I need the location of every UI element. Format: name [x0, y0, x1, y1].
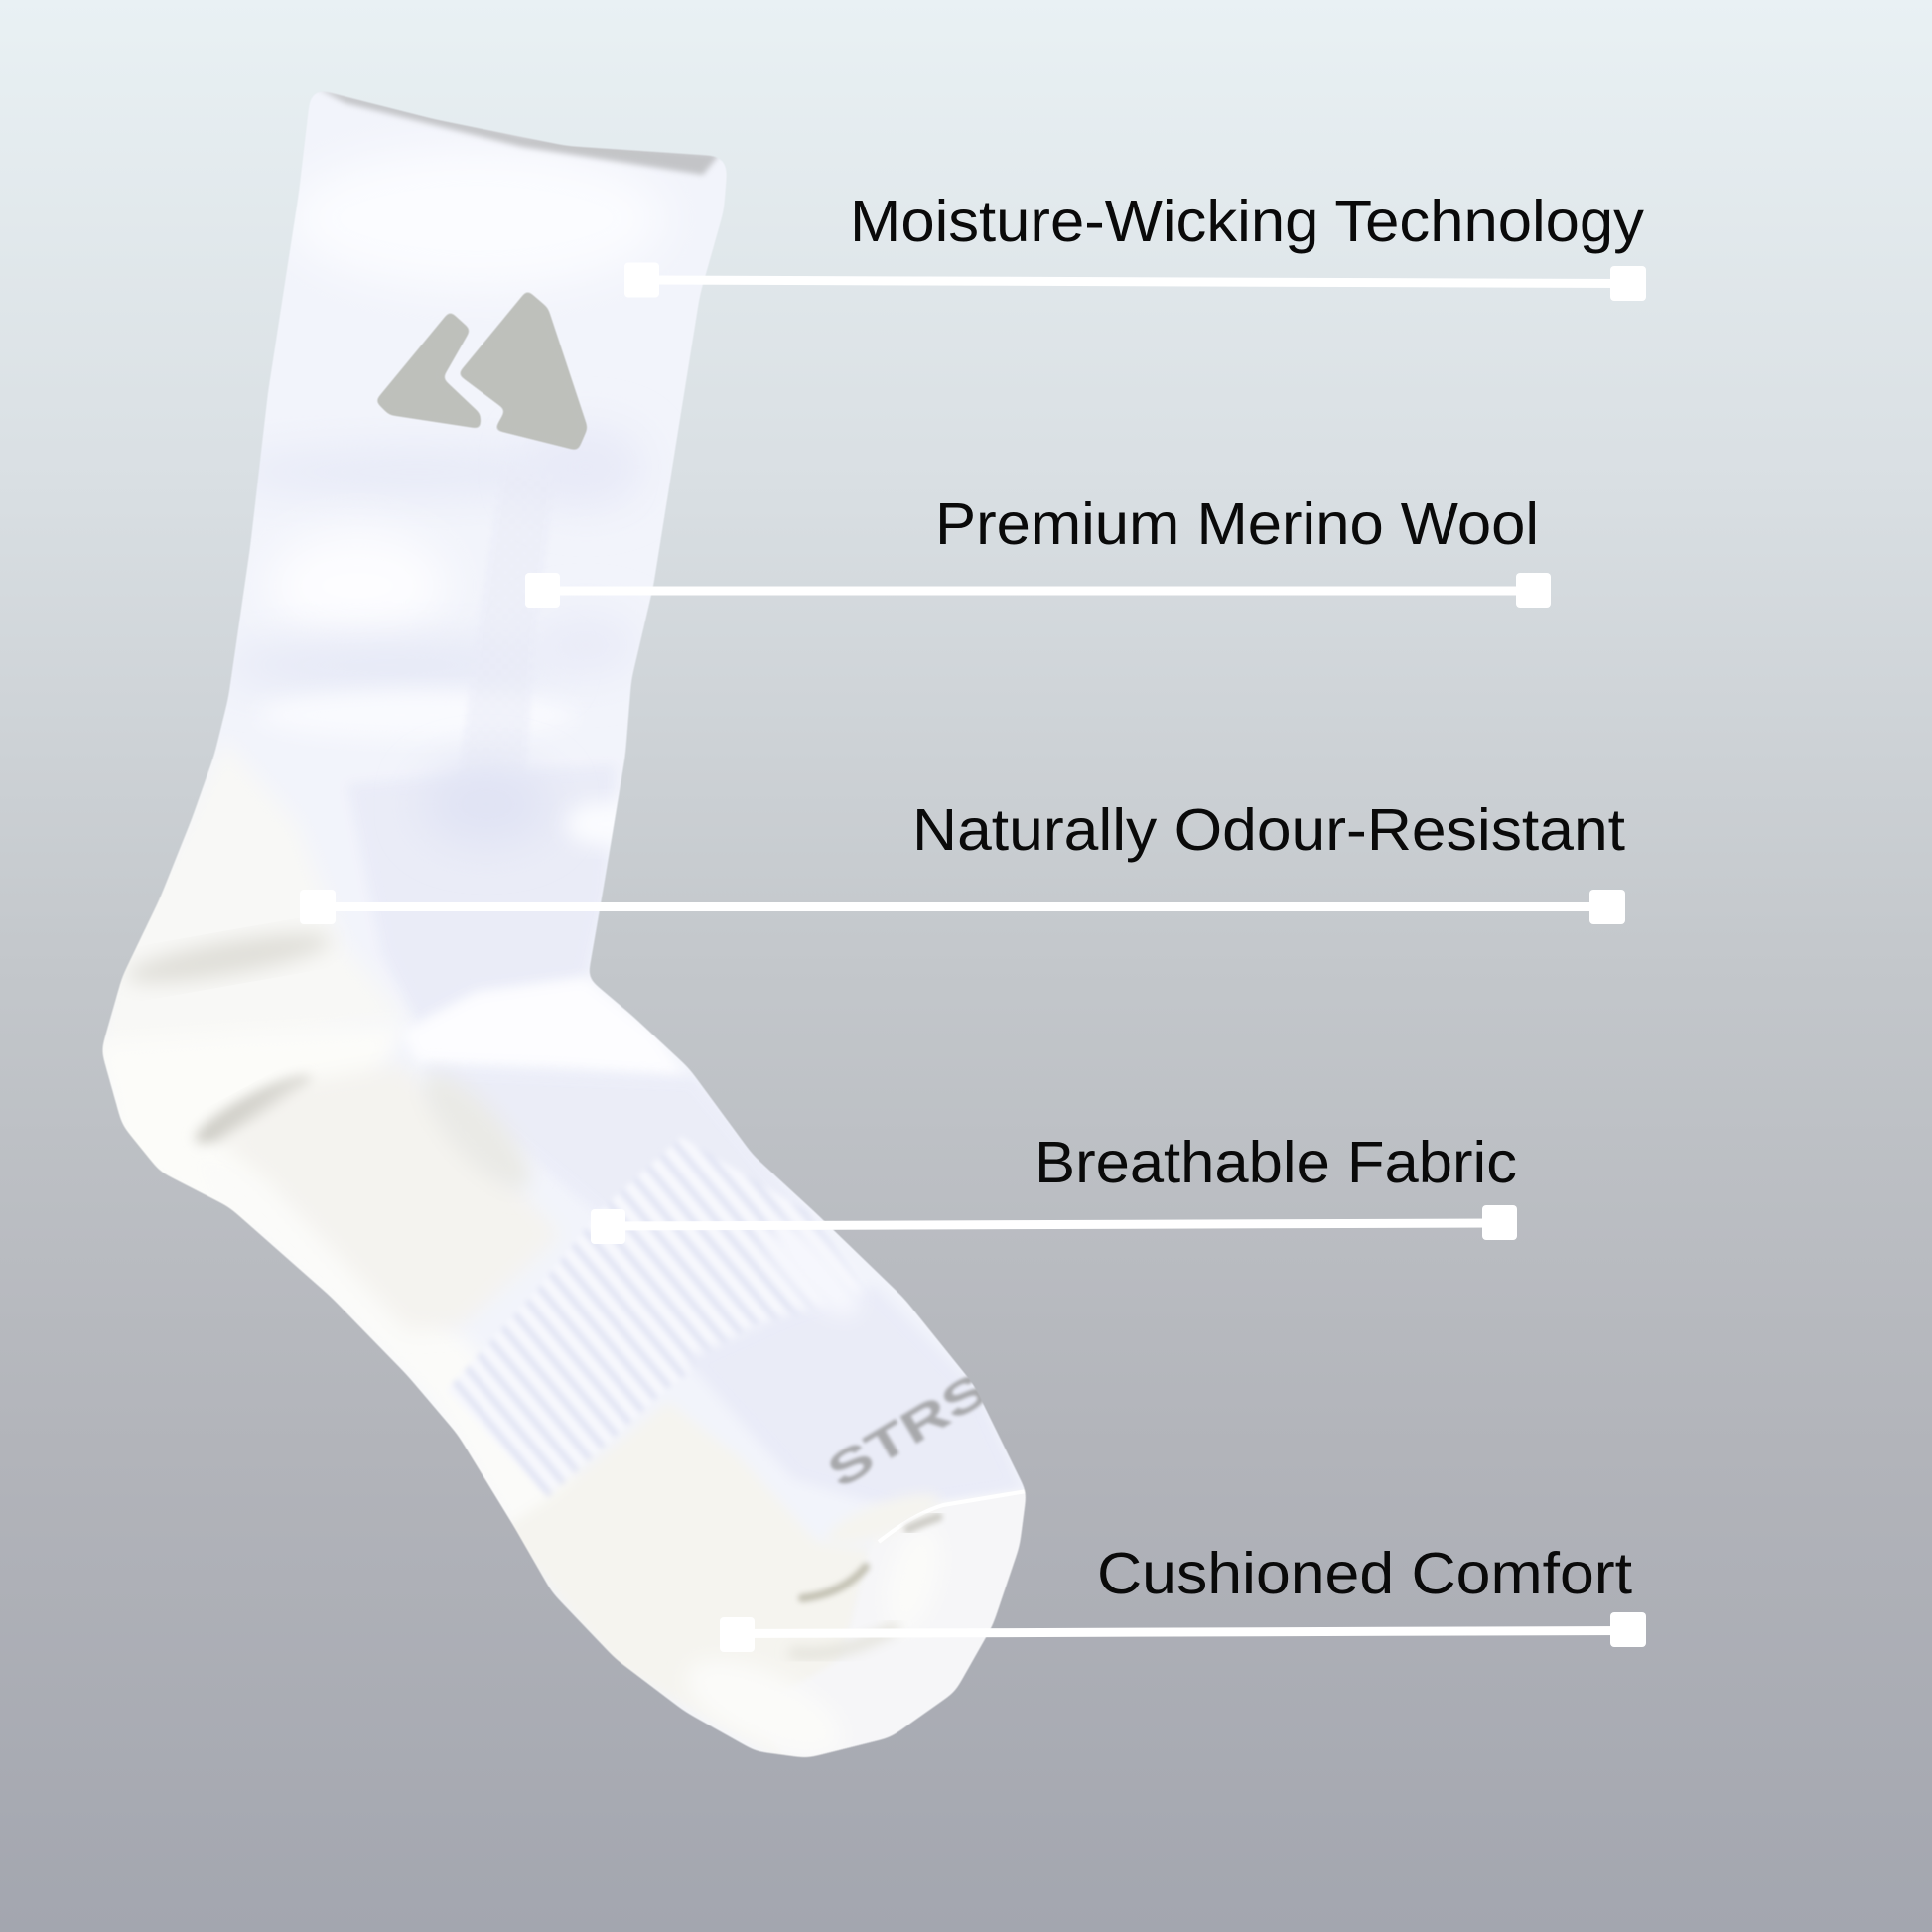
forefoot knit	[701, 1296, 1006, 1495]
callout: Premium Merino Wool	[525, 491, 1551, 608]
label text: Cushioned Comfort	[1097, 1541, 1632, 1606]
sock anchor	[591, 1209, 625, 1244]
instep white band	[412, 980, 672, 1069]
sock photo illustration	[79, 69, 1052, 1777]
mountain logo on cuff	[375, 290, 588, 451]
callout: Moisture-Wicking Technology	[624, 189, 1646, 301]
sock anchor	[624, 262, 659, 298]
leader line	[608, 1223, 1499, 1226]
sock silhouette	[79, 69, 1052, 1777]
label text: Premium Merino Wool	[935, 491, 1539, 557]
sock leg shading	[218, 149, 665, 784]
end marker	[1610, 266, 1646, 301]
end marker	[1516, 573, 1551, 608]
leader line	[737, 1630, 1628, 1634]
sock anchor	[720, 1617, 755, 1652]
ribbed arch band	[453, 1141, 831, 1496]
callout: Breathable Fabric	[591, 1130, 1517, 1244]
end marker	[1482, 1205, 1517, 1240]
callout: Cushioned Comfort	[720, 1541, 1646, 1652]
instep knit	[422, 1067, 824, 1291]
lower foot white edge	[261, 1215, 540, 1513]
sock anchor	[300, 890, 336, 924]
inner cuff shadow	[316, 87, 720, 175]
brand lettering on toe: STRS	[818, 1362, 997, 1498]
heel cushion	[104, 921, 386, 1189]
callout: Naturally Odour-Resistant	[300, 797, 1625, 924]
leader line	[642, 280, 1628, 284]
label text: Moisture-Wicking Technology	[850, 189, 1645, 254]
toe cream cushion	[514, 1409, 1025, 1744]
label text: Breathable Fabric	[1035, 1130, 1517, 1195]
sole cream panel	[222, 1072, 548, 1322]
leader line	[542, 586, 1534, 596]
end marker	[1610, 1612, 1646, 1647]
end marker	[1589, 890, 1625, 924]
ankle knit panel	[364, 780, 600, 1001]
sock anchor	[525, 573, 560, 608]
leader line	[318, 902, 1607, 911]
label text: Naturally Odour-Resistant	[912, 797, 1625, 863]
